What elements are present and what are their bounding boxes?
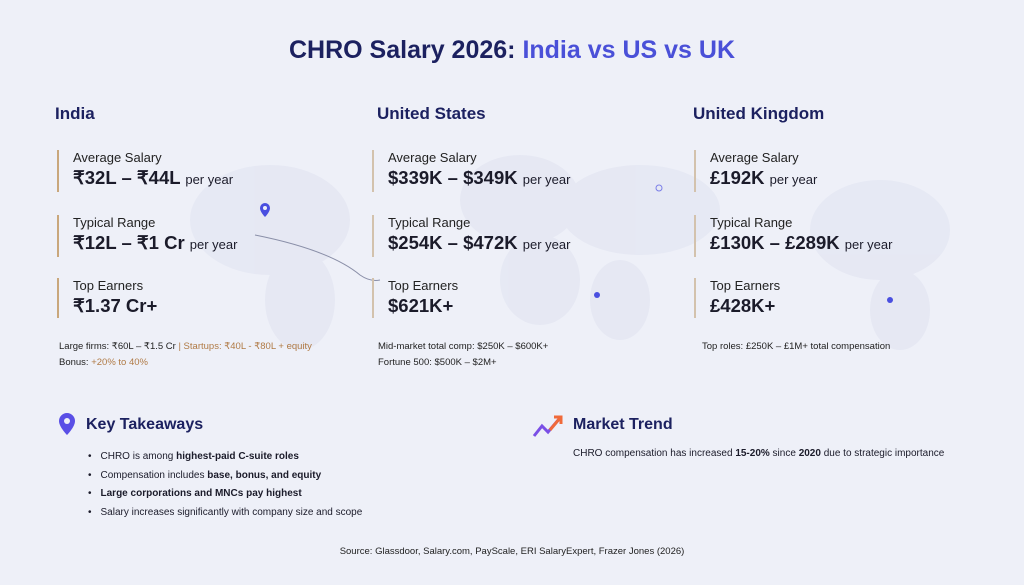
panel: India: ₹12L – ₹1 Cr per year [73,232,237,253]
panel: India: ₹1.37 Cr+ [73,295,157,316]
panel: Market Trend [532,416,944,459]
heading US: United States [377,104,486,123]
panel: India: Large firms: ₹60L – ₹1.5 Cr | Startups: ₹40L - ₹80L + equity [59,341,312,352]
bullets: Compensation includes base, bonus, and equity [101,470,321,480]
icon: pin [59,413,75,435]
panel: United Kingdom: £428K+ [710,295,775,316]
panel: United States: Fortune 500: $500K – $2M+ [378,357,497,368]
source: Source: Glassdoor, Salary.com, PayScale, ERI SalaryExpert, Frazer Jones (2026) [340,546,684,557]
panel: United States: Average Salary [388,150,477,165]
panel: United Kingdom: Typical Range [710,215,792,230]
panel: United Kingdom: Average Salary [710,150,799,165]
bullets: CHRO is among highest-paid C-suite roles [101,451,299,462]
panel: Key Takeaways [59,413,362,518]
title: CHRO Salary 2026: India vs US vs UK [289,36,735,64]
panel: United Kingdom: Top Earners [710,278,780,293]
panel: India: Bonus: +20% to 40% [59,357,148,368]
panel: United States: Top Earners [388,278,458,293]
bullets: Salary increases significantly with company size and scope [101,506,362,518]
text: CHRO compensation has increased 15-20% since 2020 due to strategic importance [573,448,944,459]
panel: India: ₹32L – ₹44L per year [73,167,233,188]
panel: India: Typical Range [73,215,155,230]
panel: United States: $339K – $349K per year [388,167,570,188]
panel: United States: $254K – $472K per year [388,232,570,253]
heading: Key Takeaways [86,416,203,433]
icon: trend [532,416,562,437]
panel: United States: Mid-market total comp: $250K – $600K+ [378,341,548,352]
bullets [88,451,362,518]
panel: United States: $621K+ [388,295,453,316]
panel: India: Top Earners [73,278,143,293]
panel: India: Average Salary [73,150,162,165]
heading India: India [55,104,95,123]
heading UK: United Kingdom [693,104,824,123]
panel: United Kingdom: £130K – £289K per year [710,232,892,253]
panel: United States: Typical Range [388,215,470,230]
bullets: Large corporations and MNCs pay highest [101,488,302,499]
panel: India [55,104,312,368]
panel: United Kingdom [693,104,892,352]
heading: Market Trend [573,416,673,433]
panel: United Kingdom: £192K per year [710,167,817,188]
panel: United Kingdom: Top roles: £250K – £1M+ total compensation [702,341,890,352]
panel: United States [372,104,570,368]
